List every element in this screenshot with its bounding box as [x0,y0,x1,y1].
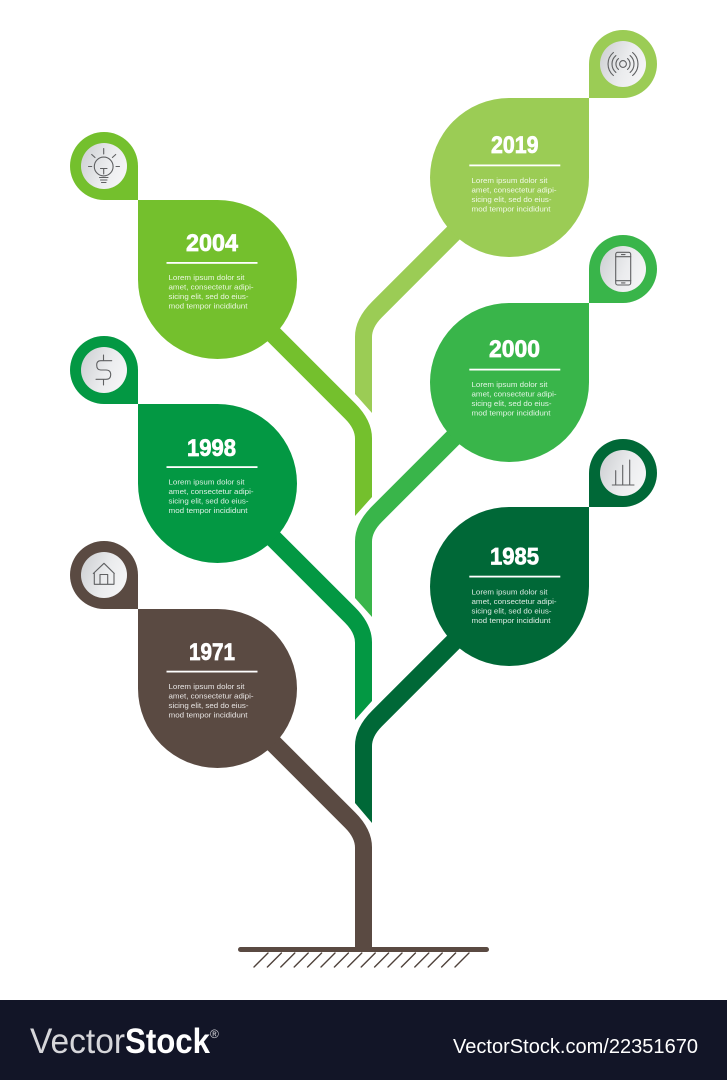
connector: 1985 stem [355,603,480,823]
footer logo: VectorStock: Vector [30,1022,125,1061]
branch: 2019 [355,30,657,413]
year: 1985: 1985 [490,544,539,570]
year: 2004: 2004 [186,230,239,257]
text: 1971: sicing elit, sed do eius- [168,701,249,710]
connector: 2004 stem [250,298,372,516]
text: 1971: Lorem ipsum dolor sit [168,682,244,691]
year: 2019: 2019 [491,132,538,159]
footer logo: VectorStock [30,1022,219,1061]
rule: 2019 [469,164,560,166]
rule: 2000 [469,369,560,370]
leaf: 1985 [430,507,589,666]
rule: 1971 [166,671,258,672]
connector: 2000 stem [355,398,480,617]
text: 1985: amet, consectetur adipi- [472,597,557,606]
branch: 1998 [70,336,372,720]
text: 2004 [168,273,254,310]
text: 1998 [168,478,254,515]
pin: 1998 [70,336,138,404]
text: 2004: mod tempor incididunt [168,302,248,310]
icon: bar chart [600,450,646,496]
pin: 2000 [589,235,657,303]
icon: smartphone [600,246,646,292]
text: 1998: mod tempor incididunt [168,506,248,515]
text: 1985: mod tempor incididunt [472,616,550,625]
icon: signal [600,41,646,87]
branch: 2004 [70,132,372,516]
branch: 2000 [355,235,657,617]
leaf: 2004 [138,200,297,359]
text: 1998: Lorem ipsum dolor sit [168,478,244,486]
pin: 2019 [589,30,657,98]
text: 2000: sicing elit, sed do eius- [472,399,552,408]
text: 2019: amet, consectetur adipi- [472,186,557,194]
rule: 2004 [166,262,258,264]
text: 2000: Lorem ipsum dolor sit [472,380,548,389]
footer bar [0,1000,727,1080]
footer id text: VectorStock.com/22351670 [453,1036,698,1058]
branch: 1985 [355,439,657,823]
footer logo: VectorStock: ® [210,1027,219,1041]
ground line with hatching [238,947,489,967]
pin: 2004 [70,132,138,200]
text: 2004: sicing elit, sed do eius- [168,292,249,301]
text: 1985: Lorem ipsum dolor sit [472,588,548,596]
text: 1971 [168,682,254,720]
leaf: 2000 [430,303,589,462]
rule: 1998 [166,466,258,468]
rule: 1985 [469,576,560,578]
text: 1971: amet, consectetur adipi- [168,692,254,700]
text: 1971: mod tempor incididunt [168,710,248,720]
connector: 1998 stem [250,502,372,720]
leaf: 1971 [138,609,297,768]
year: 2000: 2000 [489,336,540,363]
year: 1971: 1971 [189,639,235,666]
text: 2019: sicing elit, sed do eius- [472,195,552,204]
text: 1985: sicing elit, sed do eius- [472,606,552,616]
leaf: 2019 [430,98,589,257]
year: 1998: 1998 [187,435,236,462]
text: 2004: Lorem ipsum dolor sit [168,273,244,282]
trunk: 1971 stem [250,707,372,950]
text: 2019 [472,176,557,214]
icon: light bulb [81,143,127,189]
text: 2000: amet, consectetur adipi- [472,390,557,398]
text: 2019: Lorem ipsum dolor sit [472,176,548,185]
text: 2000 [472,380,557,418]
text: 2004: amet, consectetur adipi- [168,282,254,292]
footer logo: VectorStock: Stock [125,1022,210,1061]
pin: 1985 [589,439,657,507]
icon: house [81,552,127,598]
text: 1985 [472,588,557,625]
branch: 1971 [70,541,372,950]
text: 2000: mod tempor incididunt [472,408,550,418]
connector: 2019 stem [355,194,480,413]
text: 1998: sicing elit, sed do eius- [168,496,249,506]
text: 1998: amet, consectetur adipi- [168,487,254,496]
icon: dollar [81,347,127,393]
pin: 1971 [70,541,138,609]
text: 2019: mod tempor incididunt [472,204,550,214]
leaf: 1998 [138,404,297,563]
